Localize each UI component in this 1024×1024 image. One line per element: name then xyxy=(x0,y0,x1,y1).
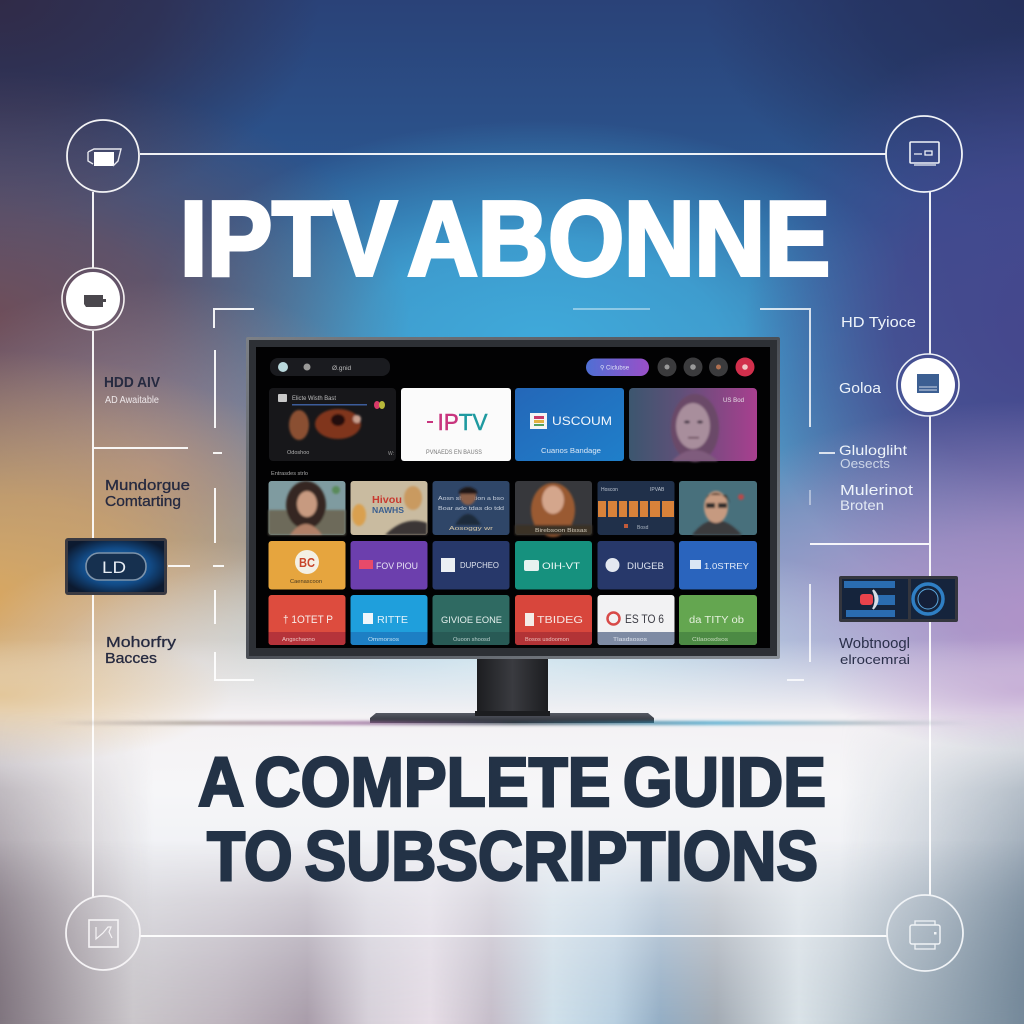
title: IPTV ABONNE xyxy=(180,180,830,298)
tile: blue: 1.0STREY xyxy=(704,561,749,571)
tile: dark green xyxy=(432,595,510,645)
screen xyxy=(256,347,770,648)
right labels: elrocemrai xyxy=(840,652,910,667)
left labels: Mundorgue xyxy=(105,477,190,494)
thumbnail: orange crowd xyxy=(598,481,674,535)
tile: purple: FOV PIOU xyxy=(376,561,418,571)
screen top bar: ⚲ Ciclubse xyxy=(600,364,630,372)
thumbnail: woman long hair: Birebsoon Bissas xyxy=(535,528,587,534)
thumbnail: presenter xyxy=(432,481,510,535)
thumbnail: poster with man xyxy=(350,481,428,535)
thumbnail: presenter: Aosn shlos tion a bso xyxy=(438,496,504,502)
tile: dark blue xyxy=(598,541,674,590)
thumbnail: poster with man: Hivou xyxy=(372,495,402,506)
left labels: Mohorfry xyxy=(106,634,177,651)
row label: Entrasdes strlo xyxy=(271,471,308,477)
tile: crimson xyxy=(515,595,592,645)
monitor xyxy=(246,337,780,659)
icon: left filled circle xyxy=(62,268,124,330)
hero card: blue xyxy=(515,388,624,461)
thumbnail: man glasses xyxy=(679,481,757,535)
tile: blue xyxy=(679,541,757,590)
tile: orange: BC xyxy=(299,555,316,570)
icon: bottom-right circle xyxy=(887,895,963,971)
left labels: Comtarting xyxy=(105,493,181,510)
tile: purple xyxy=(350,541,428,590)
thumbnail: presenter: Aosoggy wr xyxy=(449,526,493,532)
thumbnail: orange crowd: Hoscon xyxy=(601,487,618,493)
tile: navy: DUPCHEO xyxy=(460,560,499,570)
connector lines xyxy=(93,154,930,936)
thumbnail: poster with man: NAWHS xyxy=(372,506,405,515)
tile: green: Ctlaoosdsos xyxy=(692,637,729,643)
hero card: blue: USCOUM xyxy=(552,414,612,428)
icon: bottom-left circle xyxy=(66,896,140,970)
tile: crimson: TBIDEG xyxy=(537,615,583,626)
tile: sky xyxy=(350,595,428,645)
thumbnail: orange crowd: Bosd xyxy=(637,525,649,531)
hero card: portrait: US Bod xyxy=(723,397,744,404)
tile: red xyxy=(268,595,346,645)
tile: sky: RITTE xyxy=(377,615,408,626)
thumbnail: orange crowd: IPVAB xyxy=(650,487,665,493)
icon: HD device xyxy=(65,538,167,595)
tile: white: ES TO 6 xyxy=(625,614,664,626)
hero card: dark movie: Elicte Wisth Bast xyxy=(292,396,336,402)
hero card: blue: Cuanos Bandage xyxy=(541,446,601,455)
tile: teal xyxy=(515,541,592,590)
tile: dark green: GIVIOE EONE xyxy=(441,615,502,626)
hero card: dark movie: Odoshoo xyxy=(287,450,309,456)
screen top bar xyxy=(270,358,754,376)
tile: dark green: Ouoon shoosd xyxy=(453,637,490,643)
thumbnail: presenter: Boar ado tdas do tdd xyxy=(438,506,504,512)
horizon line xyxy=(50,722,975,724)
hero card: portrait xyxy=(629,388,757,462)
tile: green: da TITY ob xyxy=(689,615,744,626)
tile: white xyxy=(598,595,674,645)
left labels: Bacces xyxy=(105,650,157,667)
right labels: Wobtnoogl xyxy=(839,636,910,652)
right labels: Mulerinot xyxy=(840,482,914,499)
tile: white: Tlasdsosos xyxy=(613,637,648,643)
tile: orange: Caenascoon xyxy=(290,579,322,585)
hero card: dark movie: W: xyxy=(388,451,394,457)
thumbnail: woman long hair xyxy=(515,481,592,537)
right labels xyxy=(839,314,916,667)
left labels: HDD AIV xyxy=(104,375,160,391)
icon: top-right circle xyxy=(886,116,962,192)
right labels: Goloa xyxy=(839,380,882,397)
hero card: IPTV: IPTV xyxy=(438,409,488,435)
tile: teal: OIH-VT xyxy=(542,561,581,571)
screen top bar: Ø.gnid xyxy=(332,365,352,372)
hero card: IPTV: PVNAEDS EN BAUSS xyxy=(426,450,482,456)
tile: crimson: Bosos usdoomon xyxy=(525,637,569,643)
right labels: Glulogliht xyxy=(839,442,907,458)
tile: dark blue: DIUGEB xyxy=(627,561,664,571)
tile: navy xyxy=(432,541,510,590)
thumbnail: woman curly hair xyxy=(268,481,346,535)
right labels: HD Tyioce xyxy=(841,314,916,331)
right labels: Broten xyxy=(840,497,884,513)
monitor stand xyxy=(370,659,654,723)
hero card: IPTV xyxy=(401,388,511,461)
right labels: Oesects xyxy=(840,457,890,471)
tile: orange xyxy=(268,541,346,590)
tile: sky: Ommorsos xyxy=(368,637,400,643)
left labels xyxy=(104,375,190,667)
tile: red: Angschaono xyxy=(282,637,315,643)
subtitle: TO SUBSCRIPTIONS xyxy=(207,817,818,895)
subtitle: A COMPLETE GUIDE xyxy=(198,743,826,821)
tile: red: † 1OTET P xyxy=(283,614,333,626)
subtitle xyxy=(198,743,826,895)
left labels: AD Awaitable xyxy=(105,395,159,406)
icon: media device xyxy=(839,576,958,622)
icon: HD device: LD xyxy=(102,558,126,577)
tile: green xyxy=(679,595,757,645)
hero card: dark movie xyxy=(269,388,396,461)
icon: top-left circle xyxy=(67,120,139,192)
icon: right filled circle xyxy=(897,354,959,416)
